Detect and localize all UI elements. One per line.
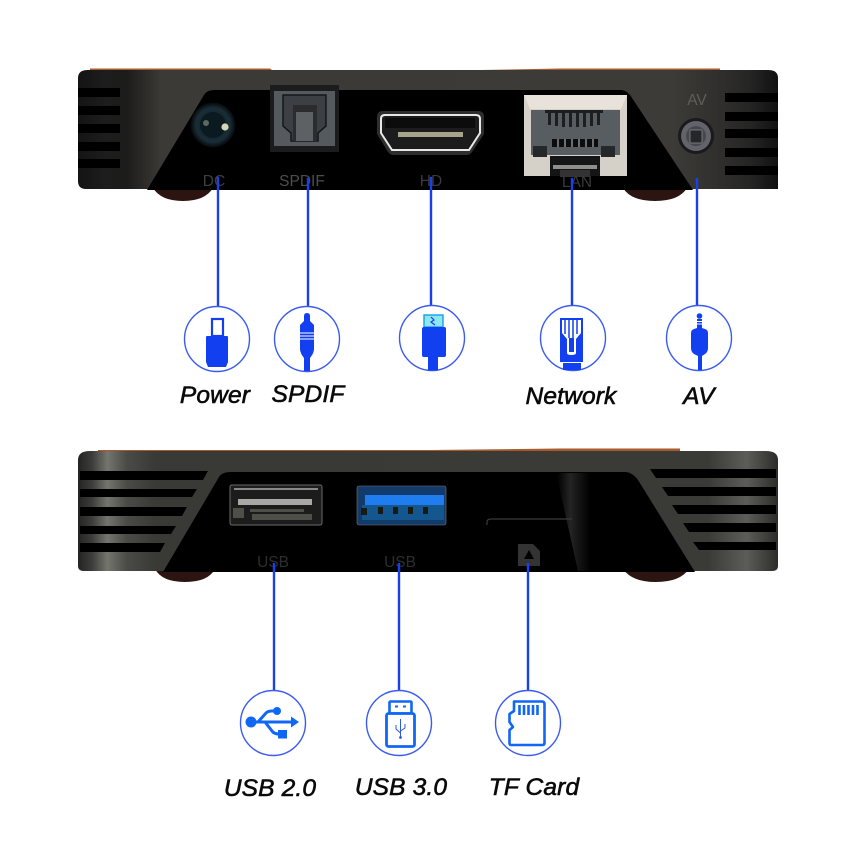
left vent slits [78, 88, 120, 168]
icon: HDMI plug [400, 306, 464, 370]
silkscreen labels: DC [203, 173, 225, 190]
silkscreen labels [257, 554, 416, 571]
device body [78, 70, 778, 189]
device body [78, 451, 778, 571]
black port panel [147, 90, 693, 190]
label: USB 3.0: USB 3.0 [355, 774, 447, 801]
silkscreen labels: AV [687, 92, 707, 109]
label: Power: Power [180, 382, 251, 409]
port: TF card slot [487, 519, 572, 525]
silkscreen labels: USB [384, 554, 416, 571]
panel: top device rear view [78, 68, 778, 201]
silkscreen labels: HD [420, 173, 442, 190]
silkscreen labels [203, 92, 707, 191]
left vent slits [80, 471, 208, 552]
connector lines: top row [218, 177, 697, 306]
silkscreen labels: USB [257, 554, 289, 571]
port: USB 3.0 [357, 486, 446, 525]
icon: SPDIF plug [274, 306, 340, 372]
rubber feet [153, 188, 687, 201]
icon: USB 3.0 stick [366, 690, 432, 756]
port: USB 2.0 [230, 485, 322, 525]
device top edge [98, 448, 680, 453]
icon: TF card [496, 690, 560, 756]
right vent slits [725, 93, 778, 175]
silkscreen labels: SPDIF [279, 173, 325, 190]
label: AV: AV [681, 383, 717, 410]
silkscreen labels: LAN [562, 174, 592, 191]
gloss reflection [556, 473, 590, 571]
panel: bottom device front view [78, 448, 778, 582]
label: SPDIF: SPDIF [272, 381, 346, 408]
label: TF Card: TF Card [489, 774, 580, 801]
port: SPDIF optical [270, 85, 339, 152]
port: HDMI [377, 111, 484, 155]
icon: USB 2.0 trident [240, 690, 306, 756]
port: AV jack [678, 118, 714, 154]
icon: TF card mark [518, 544, 540, 566]
icon: power [184, 306, 250, 372]
label: Network: Network [526, 383, 618, 410]
label: USB 2.0: USB 2.0 [224, 775, 316, 802]
connector lines: bottom row [274, 563, 528, 690]
icon: network plug [540, 306, 606, 370]
device top edge [90, 68, 720, 72]
rubber feet [155, 569, 689, 582]
port: LAN [524, 95, 627, 177]
port: DC jack [190, 102, 236, 148]
black port panel [163, 472, 695, 572]
icon: AV plug [666, 306, 732, 370]
right vent slits [650, 469, 776, 550]
